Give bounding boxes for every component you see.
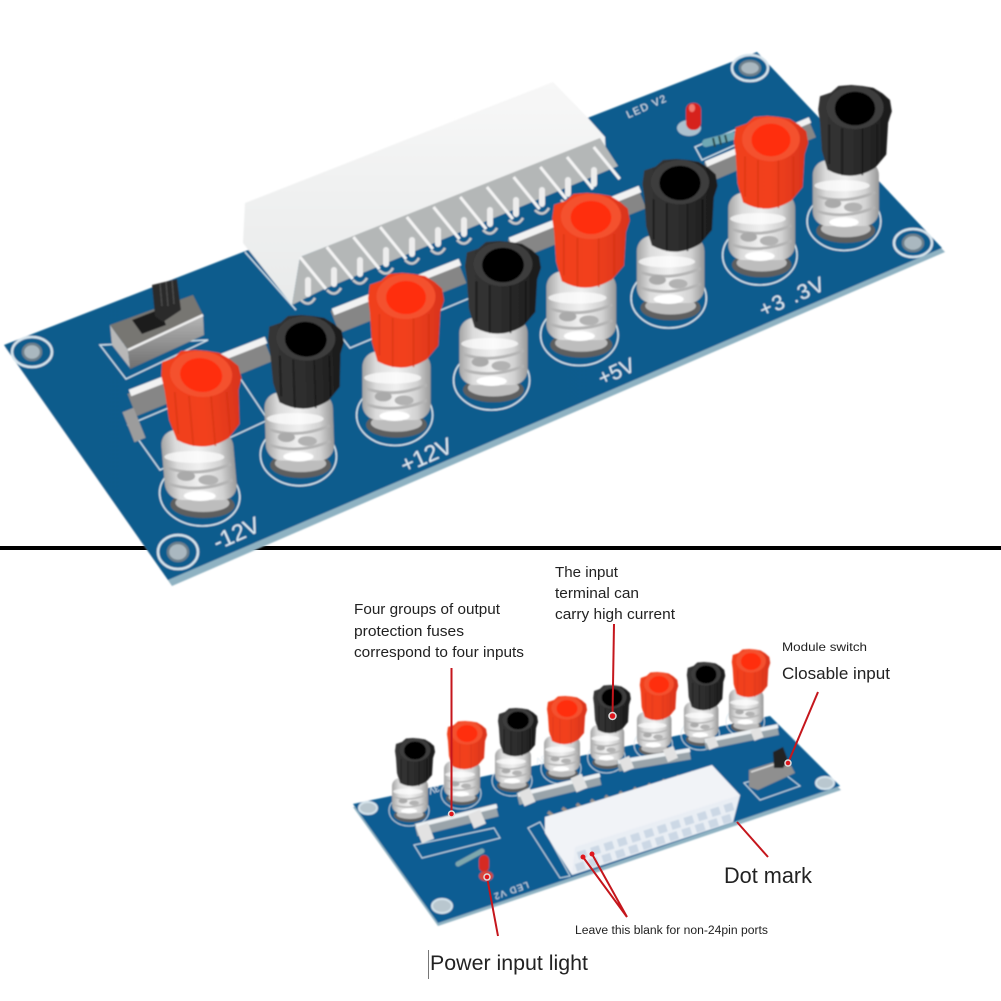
label: blank pins: Leave this blank for non-24pin ports [575,925,768,937]
binding post: 1 red [147,350,254,526]
voltage labels: +12V [396,432,457,478]
resistor [706,135,733,147]
bottom product photo: board [353,649,841,926]
board edge [353,718,841,926]
24-pin connector [545,765,740,875]
lines: blank pins [583,854,627,917]
annotation lines [448,624,818,936]
binding posts [389,649,770,826]
binding post: 3 red [357,273,444,445]
binding post: 6 black [631,159,718,328]
mounting holes [359,777,834,913]
fuses [128,120,812,440]
connector pins [548,768,713,818]
divider line [0,546,1001,550]
label: fuses: protection fuses [354,624,464,640]
resistor [458,851,482,864]
fuses [416,726,778,841]
voltage labels: -12V [209,511,264,555]
line: dot mark [737,822,768,857]
line: power light [487,877,498,936]
label: input terminal: carry high current [555,607,675,623]
label: fuses: correspond to four inputs [354,645,524,661]
top product photo: board [4,52,945,586]
board edge [5,53,945,586]
label: input terminal: The input [555,565,618,581]
label: module switch: Module switch [782,640,867,654]
label: input terminal [555,565,675,623]
board surface [353,716,840,923]
bottom product photo: board: LED V2 [492,880,530,902]
bottom product photo: board: 5V [534,753,548,766]
label: fuses: Four groups of output [354,602,500,618]
voltage labels [209,92,829,555]
voltage labels: +3 .3V [756,272,829,322]
board surface [4,52,942,580]
line: fuses [450,668,452,814]
binding post: 2 black [256,315,349,486]
label: dot mark: Dot mark [724,863,813,888]
mounting holes [12,55,932,569]
slide switch [749,747,795,790]
binding post: 8 black [807,85,892,250]
line: input terminal [612,624,614,716]
slide switch [110,279,204,369]
label: input terminal: terminal can [555,586,639,602]
LED [479,855,493,881]
silkscreen outlines and marks [414,772,800,878]
voltage labels: LED V2 [625,92,669,121]
binding post: 4 black [454,241,541,410]
label: fuses [354,602,524,661]
silkscreen outlines [100,130,742,470]
binding post: 7 red [723,116,808,285]
voltage labels: +5V [595,354,639,390]
LED [677,103,701,136]
binding post: 5 red [541,193,630,365]
24-pin connector housing [243,82,620,305]
label: power input light: Power input light [430,952,588,975]
bottom product photo: board: 3V [427,783,441,796]
label: closable input: Closable input [782,665,890,683]
line: switch [788,692,818,763]
